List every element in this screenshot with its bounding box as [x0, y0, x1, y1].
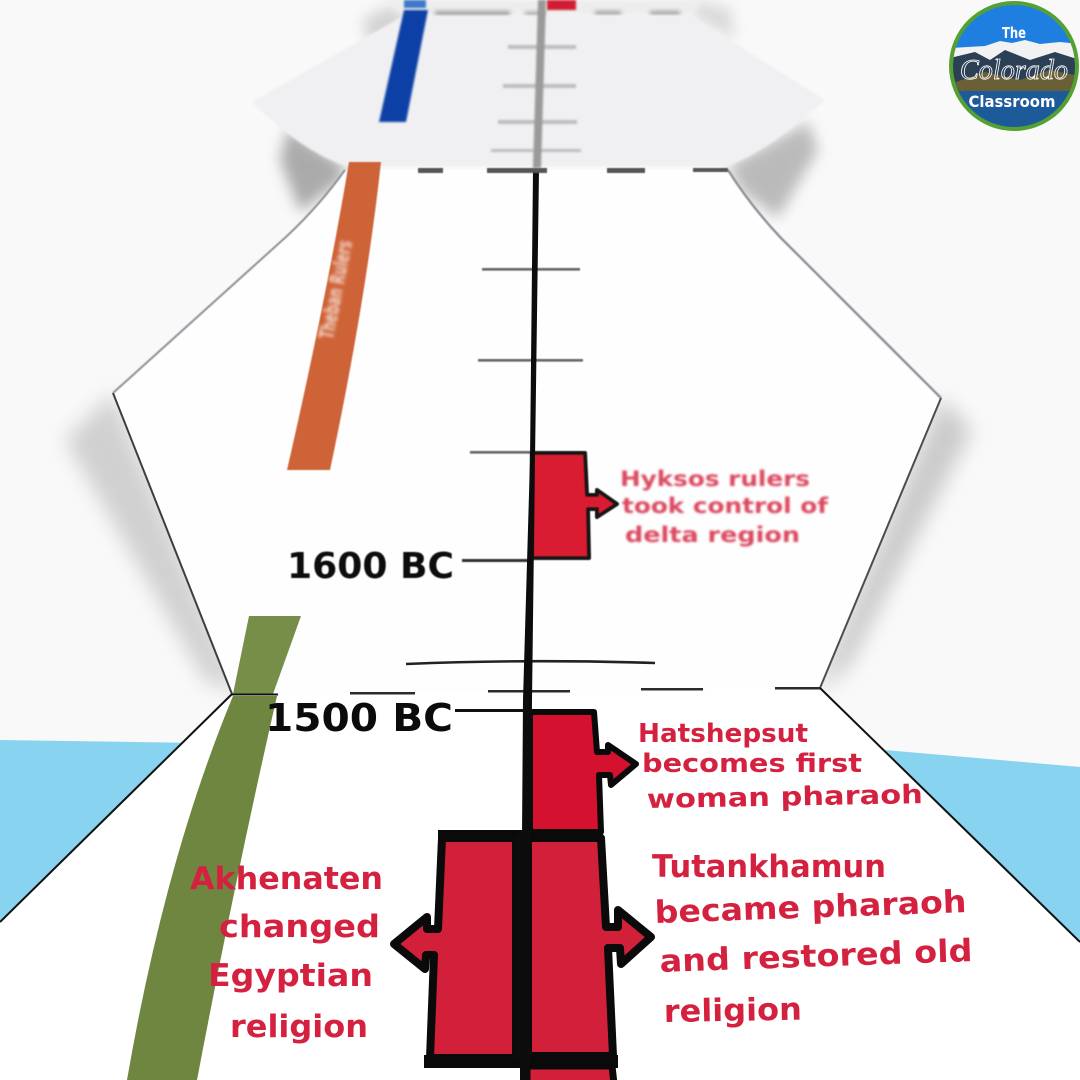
blue paper left — [0, 740, 200, 1000]
Hyksos caption: took control of — [622, 494, 829, 518]
logo mountains — [950, 40, 1080, 62]
Hatshepsut caption: Hatshepsut — [638, 719, 808, 749]
black separator bars — [424, 830, 618, 1068]
Tutankhamun caption: became pharaoh — [654, 884, 967, 931]
timeline axis — [515, 0, 546, 1080]
Akhenaten caption: Egyptian — [208, 958, 373, 994]
Hyksos red block with arrow — [532, 453, 617, 558]
green era band, lower part — [127, 696, 277, 1080]
panel: lower front page — [0, 687, 1080, 1080]
Tutankhamun caption: and restored old — [659, 933, 973, 980]
logo: The Colorado Classroom: Classroom — [968, 92, 1056, 111]
fold line over green band — [232, 694, 278, 696]
logo: The Colorado Classroom: Colorado — [960, 55, 1068, 86]
1600 BC tick — [462, 559, 528, 562]
Hatshepsut red block with arrow — [530, 712, 636, 832]
Hyksos caption: delta region — [625, 523, 800, 547]
Hatshepsut caption: becomes first — [642, 749, 862, 779]
upper hexagon tick marks — [491, 45, 581, 152]
blue paper right — [850, 747, 1080, 1000]
fold dashes — [350, 687, 820, 694]
Akhenaten caption — [190, 861, 383, 1045]
orange band label: Theban Rulers — [314, 238, 357, 341]
green era band, upper part — [233, 616, 301, 694]
hexagon outline — [113, 170, 941, 694]
panel: middle hexagon — [113, 162, 941, 694]
1500 BC label: 1500 BC — [265, 696, 453, 740]
orange era band — [287, 162, 381, 470]
Tutankhamun caption: religion — [664, 992, 802, 1030]
distant blue band — [404, 0, 426, 8]
Tutankhamun caption — [652, 849, 973, 1030]
1600 BC label: 1600 BC — [287, 546, 454, 587]
logo text: The — [1002, 24, 1026, 42]
Hatshepsut caption: woman pharaoh — [647, 780, 923, 815]
next red block — [527, 1066, 614, 1080]
distant red block — [547, 0, 576, 10]
panel: upper hexagon — [252, 10, 825, 166]
Akhenaten red block with arrow — [394, 838, 516, 1058]
1500 BC tick — [455, 709, 530, 712]
Tutankhamun caption: Tutankhamun — [652, 849, 886, 885]
dashes on farthest fold — [435, 11, 680, 18]
Hyksos caption — [620, 467, 829, 547]
Akhenaten caption: Akhenaten — [190, 861, 383, 897]
curved century tick — [406, 661, 655, 664]
Tutankhamun red block with arrow — [528, 838, 651, 1056]
Hatshepsut caption — [638, 719, 923, 815]
blue era band — [379, 10, 428, 122]
panel: farthest fold — [385, 0, 705, 18]
panel shadows — [65, 0, 972, 694]
logo: The Colorado Classroom — [949, 0, 1080, 133]
Akhenaten caption: changed — [219, 909, 380, 945]
Hyksos caption: Hyksos rulers — [620, 467, 810, 491]
middle hexagon tick marks — [470, 268, 583, 454]
Akhenaten caption: religion — [230, 1009, 368, 1045]
front page outline — [0, 688, 1080, 942]
upper fold dashes — [418, 168, 728, 173]
